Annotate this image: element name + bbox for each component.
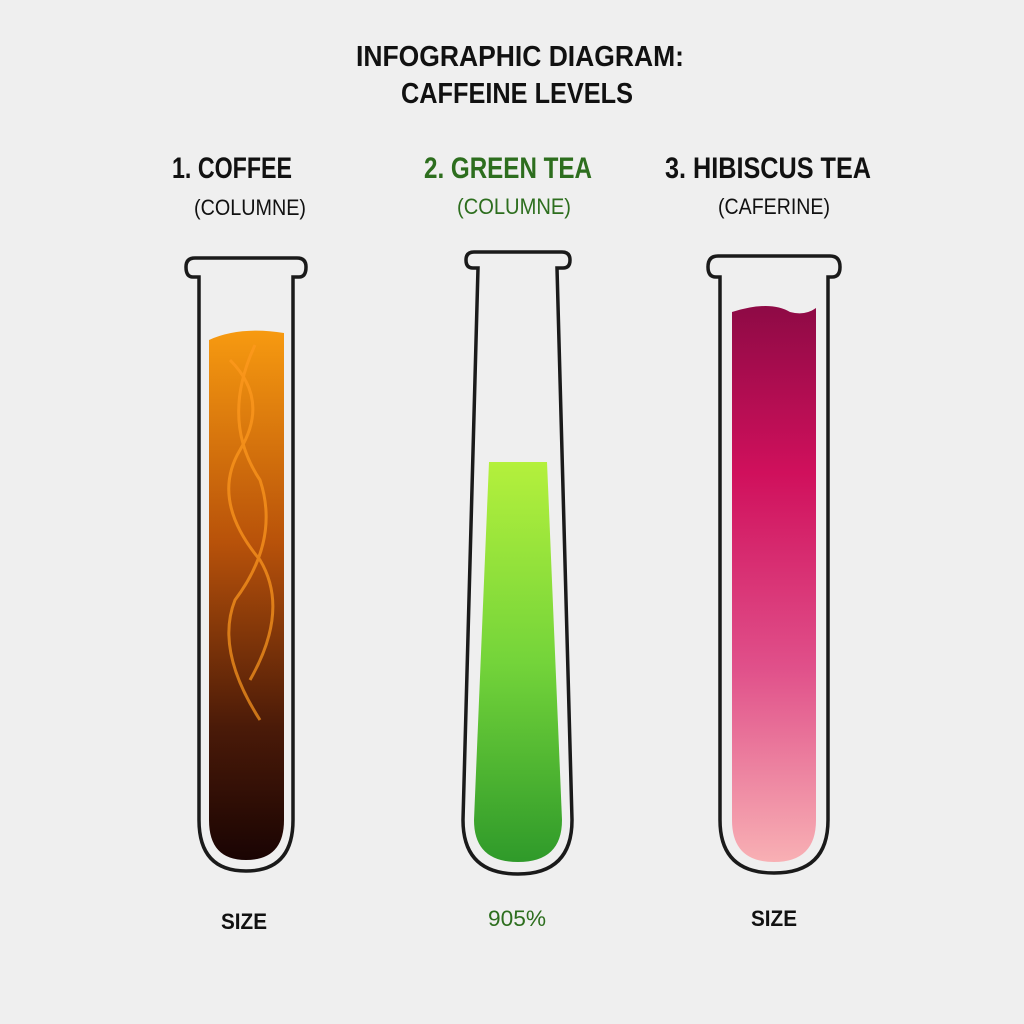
- tube: green tea: [463, 252, 572, 874]
- label: green tea percent: 905%: [488, 906, 546, 931]
- heading: coffee: [172, 152, 306, 220]
- title: [356, 41, 684, 110]
- label: hibiscus size: SIZE: [751, 906, 797, 931]
- title: INFOGRAPHIC DIAGRAM:: [356, 41, 684, 73]
- heading: green tea: (COLUMNE): [457, 194, 571, 219]
- heading: green tea: 2. GREEN TEA: [424, 152, 592, 185]
- tube: hibiscus tea: [708, 256, 840, 873]
- heading: coffee: 1. COFFEE: [172, 152, 292, 185]
- label: coffee size: SIZE: [221, 909, 267, 934]
- heading: hibiscus tea: (CAFERINE): [718, 194, 830, 219]
- heading: hibiscus tea: 3. HIBISCUS TEA: [665, 152, 871, 185]
- title: CAFFEINE LEVELS: [401, 78, 633, 110]
- heading: green tea: [424, 152, 592, 219]
- tube: coffee: [186, 258, 306, 871]
- heading: coffee: (COLUMNE): [194, 195, 306, 220]
- heading: hibiscus tea: [665, 152, 871, 219]
